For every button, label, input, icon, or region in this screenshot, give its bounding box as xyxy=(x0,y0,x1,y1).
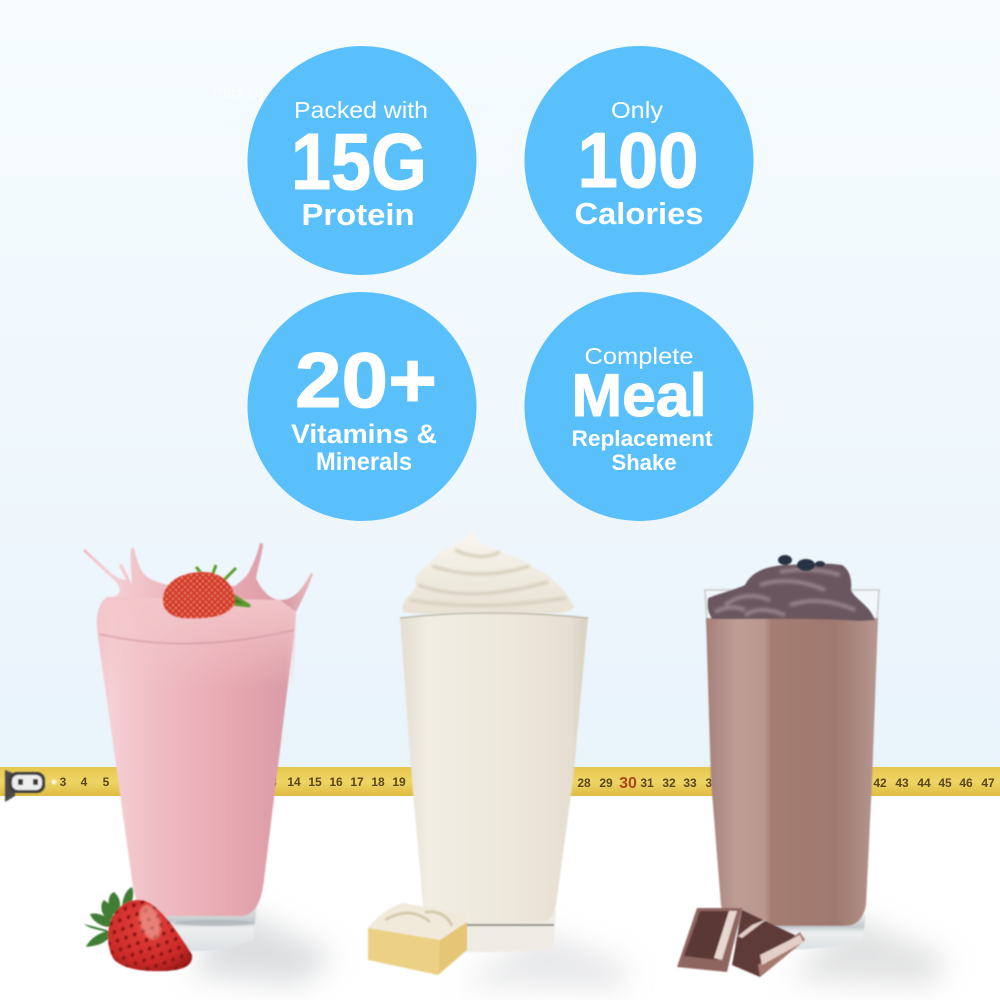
measuring tape: 16 xyxy=(329,775,343,789)
floor shadows xyxy=(190,905,950,990)
badge: 100 calories: 100 xyxy=(578,116,698,204)
badge: complete meal: Shake xyxy=(612,450,676,475)
measuring tape: 5 xyxy=(103,775,110,789)
cake square xyxy=(368,903,467,975)
measuring tape xyxy=(0,767,1000,796)
glass base xyxy=(722,915,866,949)
measuring tape: 33 xyxy=(683,776,697,790)
vanilla shake xyxy=(400,532,588,952)
chocolate shake xyxy=(705,555,879,949)
measuring tape: 44 xyxy=(917,776,931,790)
liquid xyxy=(400,612,588,922)
strawberry shake xyxy=(83,543,313,951)
rim line xyxy=(400,613,588,618)
measuring tape: 13 xyxy=(263,775,277,789)
badge: 15G protein: Packed with xyxy=(294,97,428,123)
measuring tape: 4 xyxy=(81,775,88,789)
liquid xyxy=(706,618,878,926)
measuring tape: 19 xyxy=(392,775,406,789)
ghost text fragment: Packed xyxy=(213,84,263,101)
badge: complete meal: Meal xyxy=(572,362,706,429)
measuring tape: 15 xyxy=(308,775,322,789)
measuring tape: 43 xyxy=(895,776,909,790)
badge: 15G protein: Protein xyxy=(302,197,414,232)
badge: 15G protein: 15G xyxy=(291,117,427,206)
pale upper surface xyxy=(97,597,296,690)
splash and liquid xyxy=(83,543,313,916)
measuring tape: 3 xyxy=(60,775,67,789)
strawberry on splash xyxy=(163,565,250,618)
badge: 20+ vitamins: Vitamins & xyxy=(291,419,437,449)
badge: 100 calories: Only xyxy=(611,97,664,123)
glass rim xyxy=(705,590,879,622)
measuring tape: 32 xyxy=(662,776,676,790)
measuring tape: 14 xyxy=(287,775,301,789)
blueberries xyxy=(778,555,825,571)
whipped cream xyxy=(403,532,574,614)
leaves xyxy=(84,887,133,947)
topping texture xyxy=(715,570,855,615)
measuring tape: 18 xyxy=(371,775,385,789)
badge: 100 calories xyxy=(524,46,754,275)
measuring tape: 42 xyxy=(873,776,887,790)
chocolate pieces xyxy=(677,908,805,977)
berry xyxy=(108,900,192,971)
glass base xyxy=(425,910,556,952)
rim line xyxy=(99,630,294,644)
measuring tape: 28 xyxy=(577,776,591,790)
topping xyxy=(707,564,875,621)
base highlight xyxy=(175,920,255,926)
measuring tape: 30 xyxy=(619,775,637,792)
measuring tape: 17 xyxy=(350,775,364,789)
badge: complete meal: Replacement xyxy=(572,426,713,451)
badge: 20+ vitamins: Minerals xyxy=(316,448,412,476)
tape hook xyxy=(5,770,56,802)
badge: complete meal: Complete xyxy=(584,343,694,369)
highlight xyxy=(136,902,164,942)
measuring tape: 34 xyxy=(705,776,719,790)
measuring tape: 31 xyxy=(640,776,654,790)
badge: 15G protein xyxy=(248,46,476,275)
badge: 20+ vitamins: 20+ xyxy=(295,336,437,424)
cream swirls xyxy=(410,550,566,606)
badge: 100 calories: Calories xyxy=(574,196,704,231)
badge: complete meal xyxy=(524,292,754,521)
glass base xyxy=(150,905,257,951)
measuring tape: 29 xyxy=(599,776,613,790)
measuring tape: 47 xyxy=(981,776,995,790)
badge: 20+ vitamins xyxy=(248,292,476,521)
measuring tape: 46 xyxy=(959,776,973,790)
measuring tape: 45 xyxy=(938,776,952,790)
strawberry front xyxy=(84,887,192,971)
